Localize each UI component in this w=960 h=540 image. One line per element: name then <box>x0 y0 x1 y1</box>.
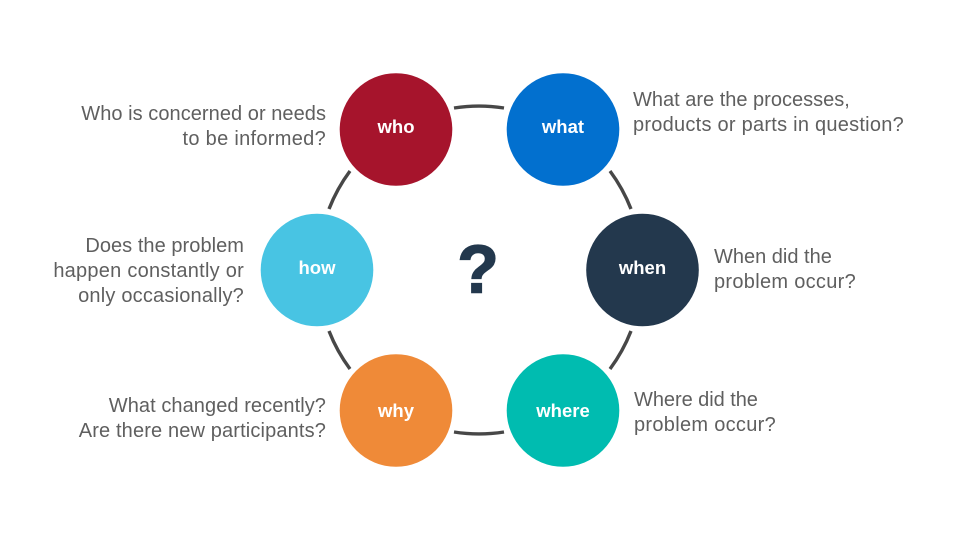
node: where <box>507 354 619 467</box>
text: when question: When did the <box>714 246 832 268</box>
text: when question: problem occur? <box>714 271 856 293</box>
node: where: where <box>535 400 590 421</box>
text: how question: Does the problem <box>85 234 244 256</box>
node: who <box>340 73 452 186</box>
node: why <box>340 354 452 467</box>
node: when: when <box>618 257 666 278</box>
node: how <box>261 214 373 326</box>
node: what: what <box>541 116 584 137</box>
node: when <box>586 214 699 326</box>
text: where question <box>634 388 776 436</box>
text: how question <box>53 234 244 307</box>
connecting arcs <box>329 106 631 434</box>
node: who: who <box>376 116 414 137</box>
text: why question <box>78 394 326 442</box>
text: what question: What are the processes, <box>633 88 850 110</box>
node: how: how <box>298 257 336 278</box>
node: why: why <box>377 400 415 421</box>
text: where question: Where did the <box>634 388 758 410</box>
icon: central question mark: ? <box>457 232 499 308</box>
node: what <box>507 73 619 186</box>
text: why question: Are there new participants? <box>79 420 326 442</box>
text: how question: happen constantly or <box>53 260 244 282</box>
text: when question <box>714 246 856 293</box>
text: where question: problem occur? <box>634 414 776 436</box>
text: what question: products or parts in question? <box>633 114 904 136</box>
text: why question: What changed recently? <box>109 394 326 416</box>
text: who question: to be informed? <box>183 128 326 150</box>
text: what question <box>633 88 904 136</box>
text: who question <box>81 102 326 150</box>
text: who question: Who is concerned or needs <box>81 102 326 124</box>
text: how question: only occasionally? <box>78 285 244 307</box>
